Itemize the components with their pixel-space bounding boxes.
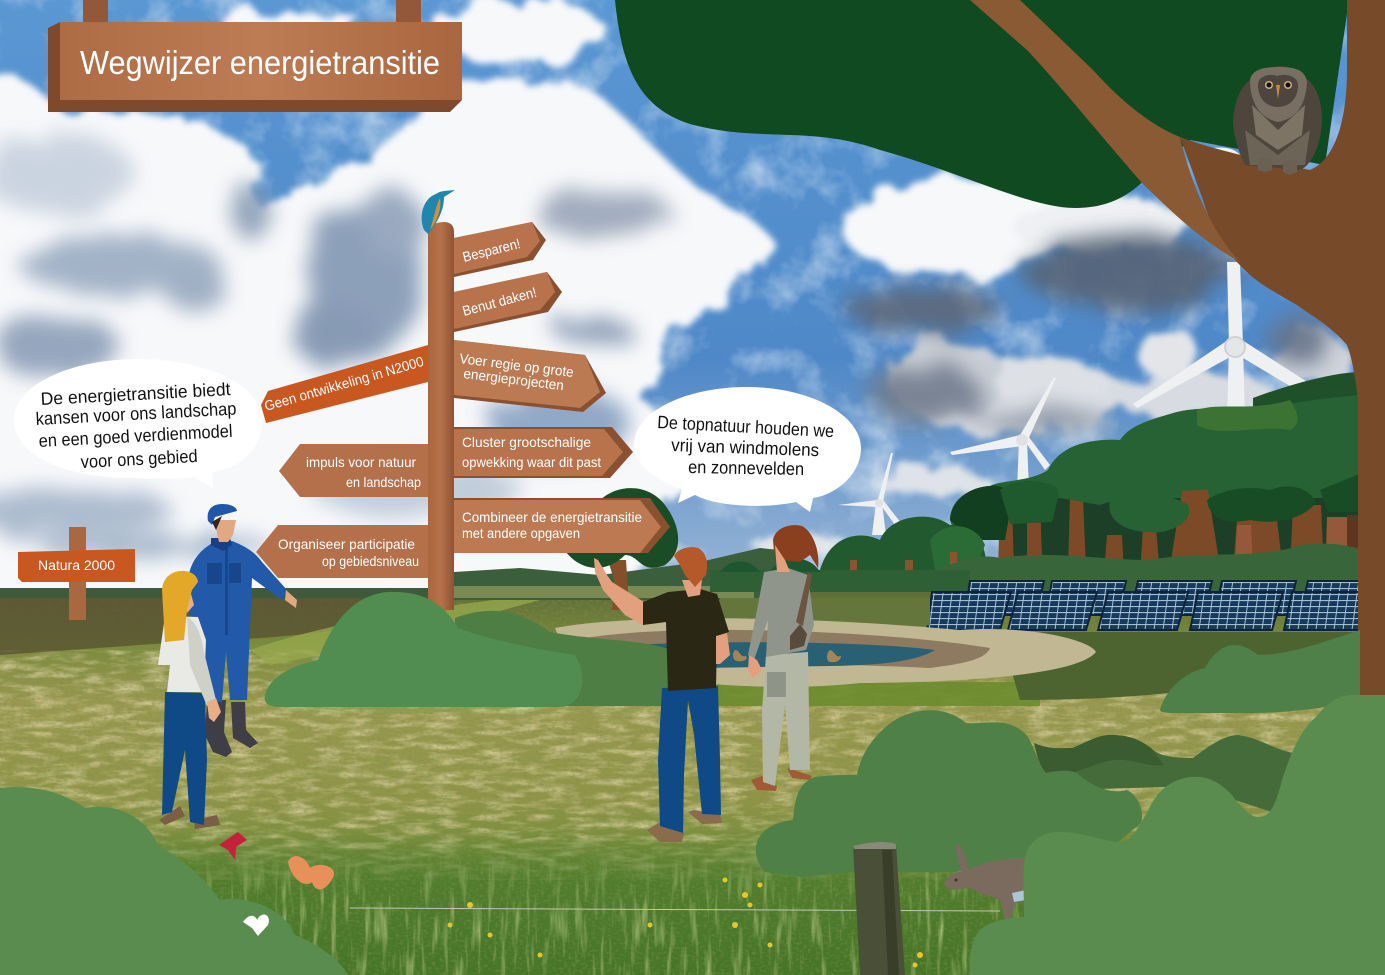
arrow: impuls	[279, 444, 428, 497]
bush: bottom right front	[969, 695, 1385, 975]
speech bubble: farmer: kansen voor ons landschap	[35, 399, 237, 429]
bush behind pole	[265, 592, 670, 707]
person: woman with binoculars	[748, 525, 818, 791]
arrow: Combineer: Combineer de energietransitie	[462, 509, 642, 525]
arrow: Benut daken	[454, 272, 562, 332]
person: woman with blond hair	[158, 571, 221, 829]
speech bubble: farmer: voor ons gebied	[80, 446, 198, 472]
Natura 2000 sign: Natura 2000	[38, 557, 115, 573]
main signpost	[256, 222, 670, 610]
speech bubble: topnatuur: vrij van windmolens	[671, 435, 819, 460]
arrow: Geen ontwikkeling in N2000: Geen ontwikkeling in N2000	[262, 353, 426, 414]
bush: dark back layer	[1034, 735, 1293, 813]
person: farmer	[188, 504, 297, 757]
distant tree line	[0, 548, 800, 600]
Natura 2000 sign	[18, 527, 135, 620]
pond	[555, 618, 1096, 687]
arrow: impuls: impuls voor natuur	[306, 454, 416, 470]
solar panels	[927, 581, 1362, 630]
bush: bottom left	[0, 787, 348, 975]
tree trunk	[1180, 0, 1385, 700]
arrow: Voer regie: Voer regie op grote	[459, 350, 575, 380]
butterflies	[219, 832, 334, 889]
arrow: Organiseer: op gebiedsniveau	[322, 553, 419, 569]
speech bubble: farmer: en een goed verdienmodel	[38, 421, 233, 451]
wind turbines	[838, 262, 1312, 535]
flower meadow strip	[720, 598, 1360, 700]
speech bubble: topnatuur: en zonnevelden	[688, 457, 804, 479]
owl	[1233, 66, 1322, 175]
arrow: Organiseer	[256, 525, 428, 578]
rabbit	[944, 843, 1030, 920]
tree canopy	[615, 0, 1385, 700]
speech bubble: topnatuur	[634, 387, 861, 512]
tree branch	[970, 0, 1240, 262]
white butterfly on bush	[243, 915, 269, 936]
sky with clouds	[0, 0, 1385, 600]
fence wire	[350, 908, 1000, 911]
arrow: Voer regie	[454, 340, 606, 412]
kingfisher	[422, 190, 455, 234]
arrow: Cluster	[454, 427, 633, 478]
bush right of pond	[1160, 630, 1360, 713]
arrow: impuls: en landschap	[346, 474, 421, 490]
arrow: Benut daken: Benut daken!	[461, 284, 538, 319]
arrow: Besparen: Besparen!	[461, 235, 522, 265]
bush: middle layer	[756, 710, 1142, 877]
title sign: Wegwijzer energietransitie	[80, 44, 440, 81]
arrow: Cluster: Cluster grootschalige	[462, 434, 591, 450]
arrow: Combineer: met andere opgaven	[462, 525, 580, 541]
yellow flowers	[448, 878, 923, 968]
speech bubble: farmer	[14, 359, 262, 488]
arrow: Combineer	[454, 498, 670, 553]
fence post	[853, 842, 905, 975]
post	[428, 222, 454, 610]
person: man pointing	[594, 547, 730, 842]
speech bubble: farmer: De energietransitie biedt	[40, 379, 231, 409]
arrow: Besparen	[454, 222, 546, 277]
speech bubble: topnatuur: De topnatuur houden we	[657, 412, 835, 441]
ground meadow	[0, 588, 1385, 975]
title sign	[48, 0, 462, 112]
arrow: Organiseer: Organiseer participatie	[278, 536, 415, 552]
arrow: Cluster: opwekking waar dit past	[462, 454, 601, 470]
tree behind sign	[566, 488, 678, 610]
arrow: Voer regie: energieprojecten	[463, 365, 565, 393]
forest	[710, 372, 1362, 592]
